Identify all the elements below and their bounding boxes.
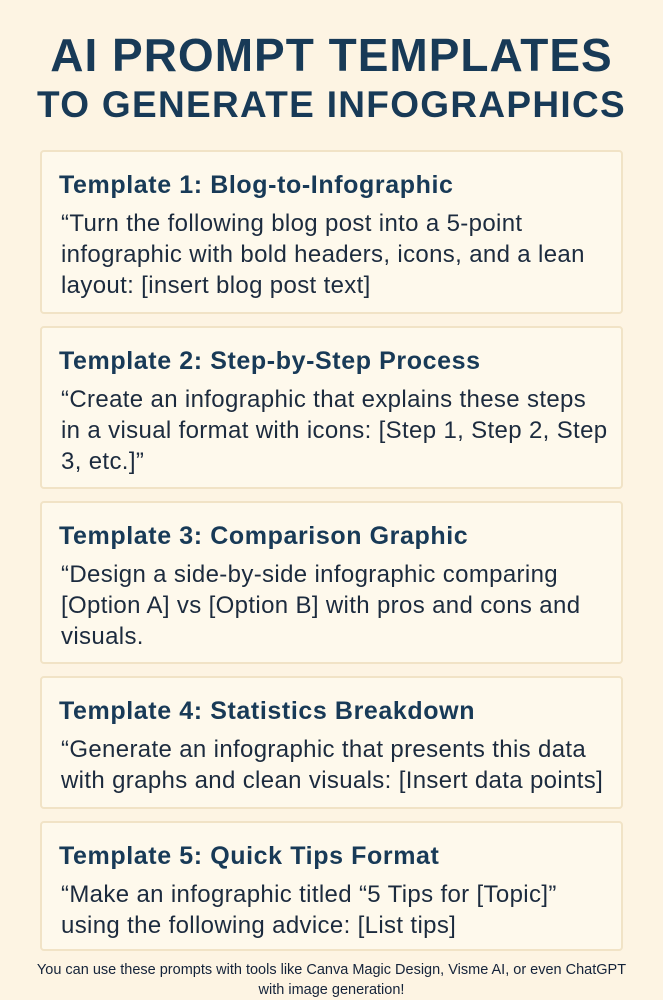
panel: template 3: Template 3: Comparison Graphic — [59, 522, 468, 550]
panel: template 4: Template 4: Statistics Breakdown — [59, 697, 475, 725]
panel: template 3: “Design a side-by-side infographic comparing — [61, 561, 558, 588]
panel: template 3: [Option A] vs [Option B] with pros and cons and — [61, 592, 580, 619]
panel: template 1: “Turn the following blog post into a 5-point — [61, 210, 522, 237]
footer note — [37, 962, 626, 998]
footer note: with image generation! — [259, 982, 404, 998]
panel: template 5 — [40, 821, 623, 951]
panel: template 2: in a visual format with icons: [Step 1, Step 2, Step — [61, 417, 607, 444]
panel: template 2 — [40, 326, 623, 489]
panel: template 2: Template 2: Step-by-Step Process — [59, 347, 481, 375]
panel: template 1: Template 1: Blog-to-Infographic — [59, 171, 454, 199]
panel: template 5: “Make an infographic titled “5 Tips for [Topic]” — [61, 881, 557, 908]
panel: template 4 — [40, 676, 623, 809]
panel: template 3 — [40, 501, 623, 664]
panel: template 1: layout: [insert blog post text] — [61, 272, 371, 299]
title: AI PROMPT TEMPLATES — [50, 29, 613, 81]
footer note: You can use these prompts with tools like Canva Magic Design, Visme AI, or even ChatGPT — [37, 962, 626, 978]
panel: template 1 — [40, 150, 623, 314]
subtitle: TO GENERATE INFOGRAPHICS — [37, 84, 626, 125]
panel: template 2: “Create an infographic that explains these steps — [61, 386, 586, 413]
panel: template 1: infographic with bold headers, icons, and a lean — [61, 241, 585, 268]
panel: template 5: using the following advice: [List tips] — [61, 912, 456, 939]
panel: template 4: “Generate an infographic that presents this data — [61, 736, 586, 763]
panel: template 2: 3, etc.]” — [61, 448, 144, 475]
panel: template 4: with graphs and clean visuals: [Insert data points] — [61, 767, 603, 794]
panel: template 3: visuals. — [61, 623, 144, 650]
panel: template 5: Template 5: Quick Tips Format — [59, 842, 439, 870]
